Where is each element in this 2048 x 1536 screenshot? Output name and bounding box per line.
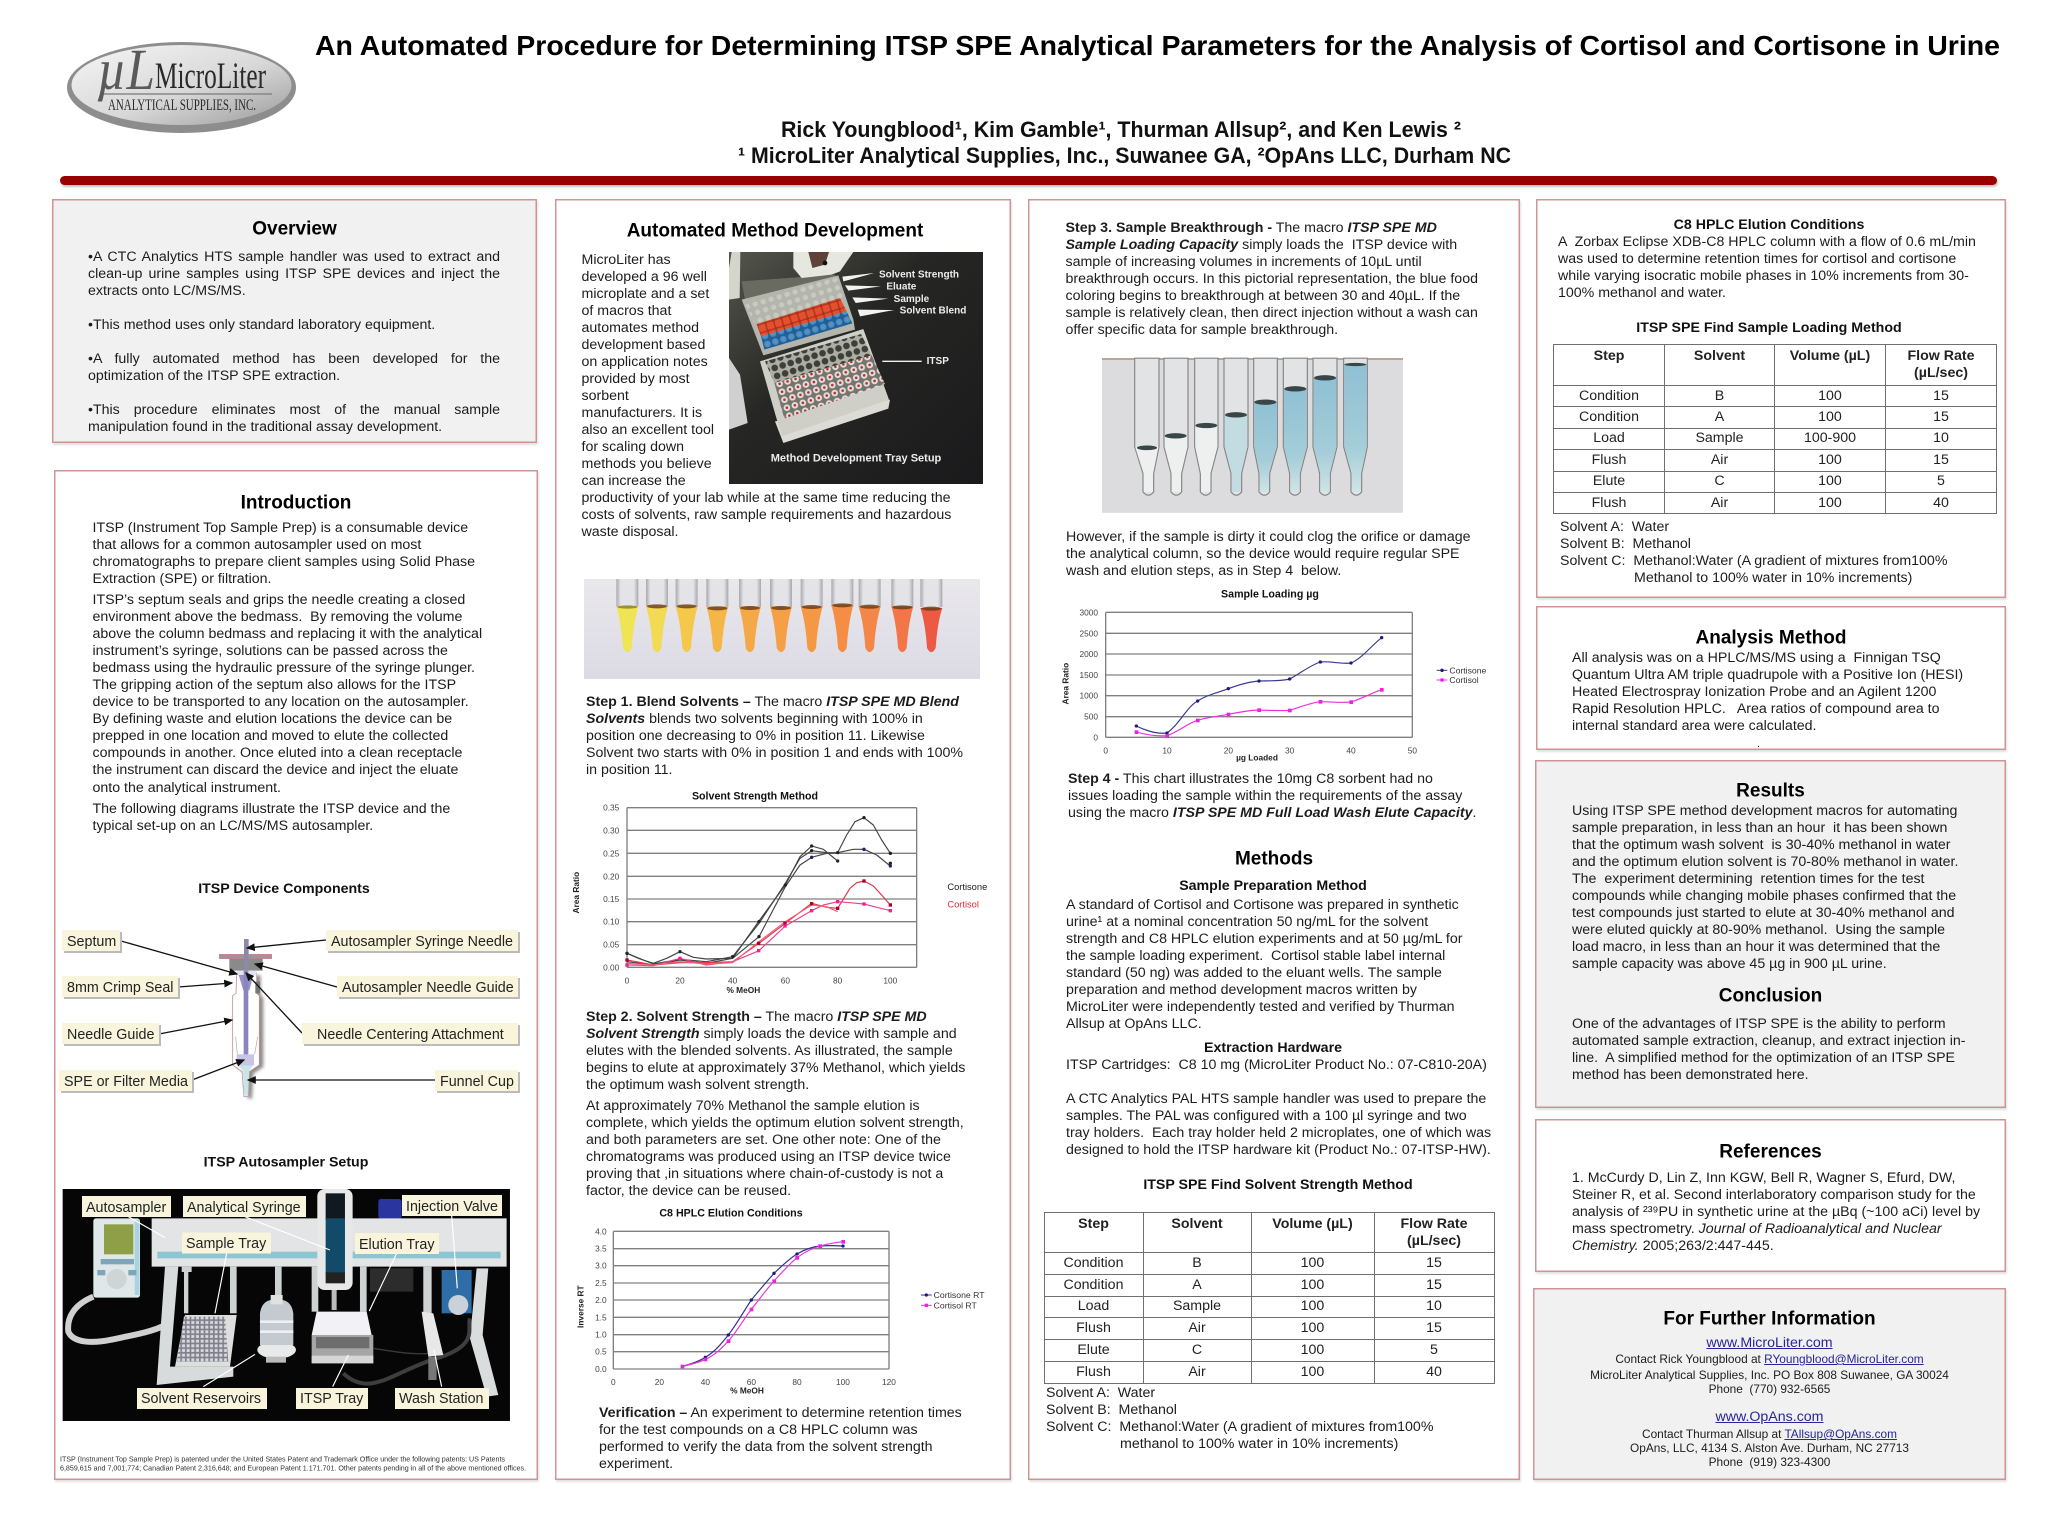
chart: C8 HPLC elution conditions: 60: [747, 1377, 756, 1387]
text: overview bullets: •This procedure eliminates most of the manual sample manipulation found in the traditional assay development.: [88, 402, 500, 435]
table: solvent strength method: 100: [1301, 1298, 1324, 1314]
photo: method development tray setup: Sample: [894, 294, 930, 305]
text: patent notice: 6,859,615 and 7,001,774; Canadian Patent 2,316,648; and European Patent 1.171.701. Other patents pending in all of the above mentioned offices.: [60, 1466, 526, 1472]
table: sample loading method: 100-900: [1804, 430, 1856, 446]
heading: results: Results: [1736, 780, 1805, 802]
chart: C8 HPLC elution conditions: [575, 1208, 985, 1396]
chart: C8 HPLC elution conditions: 100: [836, 1377, 850, 1387]
chart: solvent strength method: 20: [675, 976, 685, 986]
table: solvent strength method: 15: [1426, 1320, 1442, 1336]
contact: MicroLiter: MicroLiter Analytical Supplies, Inc. PO Box 808 Suwanee, GA 30024: [1590, 1368, 1949, 1382]
chart: solvent strength method: % MeOH: [726, 985, 760, 995]
table: sample loading method: Condition: [1579, 409, 1639, 425]
table: solvent strength method: 100: [1301, 1364, 1324, 1380]
heading: C8 HPLC elution conditions: C8 HPLC Elution Conditions: [1674, 216, 1864, 232]
text: method development intro: MicroLiter has developed a 96 well microplate and a set of macros that automates method development based on application notes provided by most sorbent manufacturers. It is also an excellent tool for scaling down methods you believe can increase the productivity of your lab while at the same time reducing the costs of solvents, raw sample requirements and hazardous waste disposal.: [582, 252, 951, 540]
chart: C8 HPLC elution conditions: 4.0: [595, 1226, 607, 1236]
table: solvent strength method: 5: [1430, 1342, 1438, 1358]
table: sample loading method: 100: [1818, 409, 1842, 425]
table: sample loading method: 100: [1818, 388, 1842, 404]
chart: sample loading: 3000: [1079, 607, 1098, 617]
table: solvent strength method: 15: [1426, 1255, 1442, 1271]
table: sample loading method: 100: [1818, 495, 1842, 511]
panel: for further information: [1533, 1288, 2006, 1480]
subheading: sample loading method table: ITSP SPE Find Sample Loading Method: [1636, 320, 1902, 336]
subheading: extraction hardware: Extraction Hardware: [1204, 1040, 1342, 1056]
chart legend: Cortisol RT: [934, 1300, 978, 1310]
diagram group: device and setup: Autosampler Syringe Needle: [331, 934, 513, 950]
chart: solvent strength method: 40: [728, 976, 738, 986]
table: sample loading method: Condition: [1579, 388, 1639, 404]
table: sample loading method: 5: [1937, 473, 1945, 489]
table: solvent strength method: Flush: [1076, 1364, 1111, 1380]
authors: Rick Youngblood¹, Kim Gamble¹, Thurman Allsup², and Ken Lewis ²: [781, 117, 1461, 142]
callouts: setup leader lines: [128, 1215, 457, 1387]
chart: C8 HPLC elution conditions: 20: [655, 1377, 664, 1387]
logo: MicroLiter Analytical Supplies: [67, 37, 296, 133]
authors: [738, 117, 1511, 168]
text: C8 description: A Zorbax Eclipse XDB-C8 HPLC column with a flow of 0.6 mL/min was used to determine retention times for cortisol and cortisone while varying isocratic mobile phases in 10% increments from 30- 100% methanol and water.: [1558, 234, 1976, 301]
chart: solvent strength method: 0.20: [603, 871, 620, 881]
table: sample loading method: Volume (µL): [1790, 348, 1870, 364]
table: solvent strength method: (µL/sec): [1407, 1233, 1461, 1249]
table: sample loading method: Load: [1593, 430, 1625, 446]
contact: OpAns: [1630, 1409, 1909, 1469]
diagram group: device and setup: Sample Tray: [186, 1236, 267, 1252]
table: solvent strength method: 10: [1426, 1298, 1442, 1314]
table: solvent strength method: Solvent: [1171, 1216, 1223, 1232]
chart: sample loading: 10: [1162, 745, 1172, 755]
text: solvent key: Solvent A: Water Solvent B: Methanol Solvent C: Methanol:Water (A gradient of mixtures from100% methanol to 100% water in 10% increments): [1046, 1384, 1433, 1452]
chart legend: [921, 1290, 985, 1310]
panel: automated method development: [555, 199, 1011, 1480]
table: solvent strength method: Flush: [1076, 1320, 1111, 1336]
photo: autosampler setup: [63, 1189, 510, 1421]
table: sample loading method: Step: [1594, 348, 1624, 364]
text: overview bullets: •A fully automated method has been developed for the optimization of the ITSP SPE extraction.: [88, 351, 500, 384]
photo: sample breakthrough vials: [1102, 358, 1403, 513]
contact: OpAns: OpAns, LLC, 4134 S. Alston Ave. Durham, NC 27713: [1630, 1441, 1909, 1455]
table: sample loading method: Elute: [1593, 473, 1625, 489]
chart: solvent strength method: 100: [883, 976, 898, 986]
chart: sample loading: 500: [1084, 711, 1098, 721]
diagram group: device and setup: Elution Tray: [359, 1237, 435, 1253]
text: ITSP cartridges: ITSP Cartridges: C8 10 mg (MicroLiter Product No.: 07-C810-20A): [1066, 1057, 1487, 1073]
diagram group: device and setup: Autosampler Needle Guide: [342, 980, 514, 996]
contact: MicroLiter: [1590, 1335, 1949, 1396]
contact: MicroLiter: Phone (770) 932-6565: [1709, 1382, 1830, 1396]
chart: sample loading: 40: [1346, 745, 1356, 755]
chart: solvent strength method: 0.15: [603, 894, 620, 904]
chart: C8 HPLC elution conditions: 1.5: [595, 1312, 607, 1322]
table: solvent strength method: B: [1192, 1255, 1202, 1271]
diagram group: device and setup: Solvent Reservoirs: [141, 1391, 261, 1407]
table: sample loading method: 100: [1818, 452, 1842, 468]
chart title: Solvent Strength Method: [692, 790, 818, 802]
table: sample loading method: Flow Rate: [1907, 348, 1974, 364]
text: intro paragraph 1: ITSP (Instrument Top Sample Prep) is a consumable device that allows for a common autosampler used on most chromatographs to prepare client samples using Solid Phase Extraction (SPE) or filtration.: [92, 520, 475, 587]
chart: C8 HPLC elution conditions: 0.0: [595, 1364, 607, 1374]
heading: conclusion: Conclusion: [1719, 986, 1822, 1006]
contact: OpAns: Contact Thurman Allsup at TAllsup@OpAns.com: [1642, 1427, 1897, 1441]
chart: C8 HPLC elution conditions: Inverse RT: [575, 1285, 585, 1328]
panel: analysis method: [1536, 606, 2006, 750]
logo: MicroLiter Analytical Supplies: µL: [97, 37, 155, 102]
text: step 4: Step 4 - This chart illustrates the 10mg C8 sorbent had no issues loading the sample within the requirements of the assay using the macro ITSP SPE MD Full Load Wash Elute Capacity.: [1068, 770, 1476, 821]
chart legend: Cortisone: [1449, 665, 1487, 675]
table: solvent strength method: Condition: [1064, 1277, 1123, 1293]
chart: C8 HPLC elution conditions: 1.0: [595, 1330, 607, 1340]
panel: C8 HPLC elution conditions: [1536, 199, 2006, 598]
table: sample loading method: [1553, 344, 1997, 514]
panel: results and conclusion: [1535, 760, 2006, 1108]
diagram group: device and setup: SPE or Filter Media: [64, 1074, 188, 1090]
chart: C8 HPLC elution conditions: 0: [611, 1377, 616, 1387]
subheading: solvent strength method table: ITSP SPE Find Solvent Strength Method: [1143, 1177, 1413, 1193]
text: sample preparation: A standard of Cortisol and Cortisone was prepared in synthetic urine¹ at a nominal concentration 50 ng/mL for the solvent strength and C8 HPLC elution experiments and at 50 µg/mL for the sample loading experiment. Cortisol stable label internal standard (50 ng) was added to the eluant wells. The sample preparation and method development macros written by MicroLiter were independently tested and verified by Thurman Allsup at OpAns LLC.: [1066, 896, 1462, 1032]
chart: sample loading: 50: [1408, 745, 1417, 755]
table: solvent strength method: 40: [1426, 1364, 1442, 1380]
table: solvent strength method: C: [1192, 1342, 1202, 1358]
table: sample loading method: Sample: [1695, 430, 1744, 446]
title divider bar: [60, 176, 1997, 185]
chart: sample loading: 30: [1285, 745, 1295, 755]
heading: ITSP autosampler setup: ITSP Autosampler Setup: [204, 1154, 369, 1170]
contact: MicroLiter: www.MicroLiter.com: [1706, 1335, 1833, 1351]
panel: overview: [52, 199, 537, 443]
chart: solvent strength method: 0.30: [603, 825, 620, 835]
title: An Automated Procedure for Determining ITSP SPE Analytical Parameters for the Analysis of Cortisol and Cortisone in Urine: [315, 30, 2000, 61]
text: patent notice: [60, 1456, 526, 1472]
chart: sample loading: Area Ratio: [1060, 662, 1070, 704]
chart: C8 HPLC elution conditions: 40: [701, 1377, 710, 1387]
diagram group: device and setup: [59, 881, 526, 1472]
chart: solvent strength method: 0.35: [603, 803, 620, 813]
text: step 3: Step 3. Sample Breakthrough - The macro ITSP SPE MD Sample Loading Capacity simply loads the ITSP device with sample of increasing volumes in increments of 10µL until breakthrough occurs. In this pictorial representation, the blue food coloring begins to breakthrough at between 30 and 40µL. If the sample is relatively clean, then direct injection without a wash can offer specific data for sample breakthrough.: [1066, 220, 1478, 338]
chart: C8 HPLC elution conditions: 3.0: [595, 1261, 607, 1271]
chart: solvent strength method: 0.00: [603, 962, 620, 972]
panel: references: [1535, 1119, 2006, 1272]
text: reference list: 1. McCurdy D, Lin Z, Inn KGW, Bell R, Wagner S, Efurd, DW, Steiner R, et al. Second interlaboratory comparison study for the analysis of ²³⁹PU in synthetic urine at the µBq (~100 aCi) level by mass spectrometry. Journal of Radioanalytical and Nuclear Chemistry. 2005;263/2:447-445.: [1572, 1170, 1980, 1254]
contact: MicroLiter: Contact Rick Youngblood at RYoungblood@MicroLiter.com: [1615, 1352, 1924, 1366]
table: sample loading method: A: [1715, 409, 1724, 425]
chart: sample loading: 1000: [1079, 690, 1098, 700]
text: patent notice: ITSP (Instrument Top Sample Prep) is patented under the United States Patent and Trademark Office under the following patents: US Patents: [60, 1456, 506, 1464]
logo: MicroLiter Analytical Supplies: MicroLiter: [155, 56, 266, 97]
table: solvent strength method: Air: [1188, 1320, 1206, 1336]
table: sample loading method: 15: [1933, 409, 1949, 425]
text: step 1: Step 1. Blend Solvents – The macro ITSP SPE MD Blend Solvents blends two solvents beginning with 100% in position one decreasing to 0% in position 11. Likewise Solvent two starts with 0% in position 1 and ends with 100% in position 11.: [586, 694, 963, 778]
panel: steps and methods: [1028, 199, 1520, 1480]
contact: OpAns: www.OpAns.com: [1715, 1409, 1824, 1425]
chart: C8 HPLC elution conditions: 2.5: [595, 1278, 607, 1288]
diagram group: device and setup: 8mm Crimp Seal: [67, 980, 173, 996]
photo: method development tray setup: ITSP: [927, 356, 949, 367]
text: intro paragraph 2: ITSP’s septum seals and grips the needle creating a closed environment above the bedmass. By removing the volume above the column bedmass and replacing it with the analytical instrument’s syringe, solutions can be passed across the bedmass using the hydraulic pressure of the syringe plunger. The gripping action of the septum also allows for the ITSP device to be transported to any location on the autosampler. By defining waste and elution locations the device can be prepped in one location and moved to elute the collected compounds in another. Once eluted into a clean receptacle the instrument can discard the device and inject the eluate onto the analytical instrument.: [92, 592, 482, 796]
diagram group: device and setup: ITSP Tray: [300, 1391, 364, 1407]
chart: sample loading: 2500: [1079, 628, 1098, 638]
photo: method development tray setup: Solvent Blend: [900, 306, 966, 317]
text: overview bullets: •A CTC Analytics HTS sample handler was used to extract and clean-up urine samples using ITSP SPE devices and inject the extracts onto LC/MS/MS.: [88, 248, 500, 299]
text: intro paragraph 3: The following diagrams illustrate the ITSP device and the typical set-up on an LC/MS/MS autosampler.: [92, 801, 450, 834]
chart: C8 HPLC elution conditions: 2.0: [595, 1295, 607, 1305]
text: step 2: Step 2. Solvent Strength – The macro ITSP SPE MD Solvent Strength simply loads the device with sample and elutes with the blended solvents. As illustrated, the sample begins to elute at approximately 37% Methanol, which yields the optimum wash solvent strength.: [586, 1008, 965, 1093]
heading: overview: Overview: [252, 218, 337, 240]
chart: solvent strength method: 0.25: [603, 848, 620, 858]
chart legend: [947, 882, 987, 909]
heading: introduction: Introduction: [241, 492, 351, 513]
table: solvent strength method: Step: [1078, 1216, 1109, 1232]
table: sample loading method: Flush: [1592, 452, 1626, 468]
table: sample loading method: Air: [1711, 495, 1728, 511]
heading: references: References: [1719, 1141, 1822, 1162]
diagram group: device and setup: Septum: [67, 934, 116, 950]
diagram group: device and setup: Needle Centering Attachment: [317, 1027, 504, 1043]
chart: solvent strength method: 0.10: [603, 917, 620, 927]
photo: method development tray setup: Solvent Strength: [879, 269, 959, 280]
table: solvent strength method: A: [1192, 1277, 1202, 1293]
heading: analysis method: Analysis Method: [1696, 628, 1846, 648]
table: solvent strength method: Air: [1188, 1364, 1206, 1380]
photo: method development tray setup: [729, 252, 983, 484]
chart: sample loading: 1500: [1079, 670, 1098, 680]
table: solvent strength method: 15: [1426, 1277, 1442, 1293]
table: sample loading method: 10: [1933, 430, 1949, 446]
table: solvent strength method: 100: [1301, 1277, 1324, 1293]
chart legend: Cortisol: [1449, 675, 1479, 685]
table: sample loading method: Flush: [1592, 495, 1626, 511]
chart: solvent strength method: 0.05: [603, 940, 620, 950]
table: solvent strength method: 100: [1301, 1255, 1324, 1271]
contact: OpAns: Phone (919) 323-4300: [1709, 1455, 1830, 1469]
table: sample loading method: 100: [1818, 473, 1842, 489]
text: overview bullets: [88, 248, 500, 435]
diagram group: device and setup: Injection Valve: [406, 1199, 498, 1215]
chart: sample loading: [1060, 588, 1487, 762]
heading: for further information: For Further Information: [1663, 1308, 1876, 1330]
chart: solvent strength method: 80: [833, 976, 843, 986]
panel: introduction: [54, 470, 538, 1480]
chart: solvent strength method: [571, 790, 987, 995]
text: verification: Verification – An experiment to determine retention times for the test compounds on a C8 HPLC column was performed to verify the data from the solvent strength experiment.: [599, 1404, 962, 1472]
chart: sample loading: 0: [1093, 732, 1098, 742]
table: sample loading method: Solvent: [1694, 348, 1745, 364]
table: solvent strength method: Condition: [1064, 1255, 1123, 1271]
chart: sample loading: 2000: [1079, 649, 1098, 659]
chart legend: Cortisone: [947, 882, 987, 892]
chart title: Sample Loading µg: [1221, 588, 1319, 600]
chart: C8 HPLC elution conditions: % MeOH: [730, 1386, 764, 1396]
table: solvent strength method: [1044, 1212, 1495, 1384]
table: sample loading method: Air: [1711, 452, 1728, 468]
table: sample loading method: 40: [1933, 495, 1949, 511]
text: conclusion: One of the advantages of ITSP SPE is the ability to perform automated sample extraction, cleanup, and extract injection in- line. A simplified method for the optimization of an ITSP SPE method has been demonstrated here.: [1572, 1016, 1966, 1083]
chart: solvent strength method: 60: [781, 976, 790, 986]
table: solvent strength method: 100: [1301, 1342, 1324, 1358]
text: step 2 continued: At approximately 70% Methanol the sample elution is complete, which yields the optimum elution solvent strength, and both parameters are set. One other note: One of the chromatograms was produced using an ITSP device twice proving that ,in situations where chain-of-custody is not a factor, the device can be reused.: [586, 1098, 964, 1199]
text: overview bullets: •This method uses only standard laboratory equipment.: [88, 317, 435, 333]
chart legend: Cortisone RT: [934, 1290, 985, 1300]
diagram group: device and setup: Analytical Syringe: [187, 1200, 301, 1216]
heading: automated method development: Automated Method Development: [627, 220, 923, 242]
chart legend: [1437, 665, 1487, 685]
diagram group: device and setup: Funnel Cup: [440, 1074, 514, 1090]
subheading: sample preparation method: Sample Preparation Method: [1179, 878, 1367, 894]
table: solvent strength method: Sample: [1173, 1298, 1221, 1314]
diagram: ITSP device: [219, 939, 272, 1099]
table: solvent strength method: Volume (µL): [1272, 1216, 1353, 1232]
text: analysis method: All analysis was on a HPLC/MS/MS using a Finnigan TSQ Quantum Ultra AM triple quadrupole with a Positive Ion (HESI) Heated Electrospray Ionization Probe and an Agilent 1200 Rapid Resolution HPLC. Area ratios of compound area to internal standard area were calculated. .: [1572, 650, 1963, 750]
text: solvent key: Solvent A: Water Solvent B: Methanol Solvent C: Methanol:Water (A gradient of mixtures from100% Methanol to 100% water in 10% increments): [1560, 519, 1947, 586]
table: solvent strength method: Load: [1078, 1298, 1109, 1314]
chart: C8 HPLC elution conditions: 3.5: [595, 1244, 607, 1254]
photo: method development tray setup: Eluate: [886, 282, 917, 293]
heading: methods: Methods: [1235, 848, 1313, 870]
table: sample loading method: B: [1715, 388, 1724, 404]
chart: sample loading: 0: [1103, 745, 1108, 755]
heading: ITSP device components: ITSP Device Components: [198, 881, 370, 897]
text: dirty sample note: However, if the sample is dirty it could clog the orifice or damage the analytical column, so the device would require regular SPE wash and elution steps, as in Step 4 below.: [1066, 528, 1471, 579]
callouts: device components: [121, 940, 435, 1080]
table: solvent strength method: Flow Rate: [1400, 1216, 1468, 1232]
authors: ¹ MicroLiter Analytical Supplies, Inc., Suwanee GA, ²OpAns LLC, Durham NC: [738, 143, 1511, 168]
diagram group: device and setup: Wash Station: [399, 1391, 484, 1407]
photo: blended solvent vials: [584, 579, 980, 679]
table: sample loading method: 15: [1933, 452, 1949, 468]
text: results: Using ITSP SPE method development macros for automating sample preparation, in less than an hour it has been shown that the optimum wash solvent is 30-40% methanol in water and the optimum elution solvent is 70-80% methanol in water. The experiment determining retention times for the test compounds while changing mobile phases confirmed that the test compounds just started to elute at 30-40% methanol and were eluted quickly at 80-90% methanol. Using the sample load macro, in less than an hour it was determined that the sample capacity was above 45 µg in 900 µL urine.: [1572, 802, 1958, 972]
chart: C8 HPLC elution conditions: 0.5: [595, 1347, 607, 1357]
chart: solvent strength method: Area Ratio: [571, 872, 581, 913]
chart: C8 HPLC elution conditions: 80: [792, 1377, 802, 1387]
photo: method development tray setup: Method Development Tray Setup: [771, 453, 942, 465]
diagram group: device and setup: Autosampler: [86, 1200, 166, 1216]
chart: C8 HPLC elution conditions: 120: [882, 1377, 896, 1387]
chart legend: Cortisol: [947, 899, 979, 909]
chart: solvent strength method: 0: [625, 976, 630, 986]
text: CTC handler: A CTC Analytics PAL HTS sample handler was used to prepare the samples. The PAL was configured with a 100 µl syringe and two tray holders. Each tray holder held 2 microplates, one of which was designed to hold the ITSP hardware kit (Product No.: 07-ITSP-HW).: [1066, 1091, 1491, 1158]
table: sample loading method: (µL/sec): [1914, 365, 1968, 381]
chart title: C8 HPLC Elution Conditions: [659, 1208, 803, 1220]
logo: MicroLiter Analytical Supplies: ANALYTICAL SUPPLIES, INC.: [108, 97, 256, 114]
table: sample loading method: 15: [1933, 388, 1949, 404]
table: solvent strength method: Elute: [1077, 1342, 1110, 1358]
diagram group: device and setup: Needle Guide: [67, 1027, 154, 1043]
chart: sample loading: 20: [1224, 745, 1233, 755]
chart: sample loading: µg Loaded: [1236, 752, 1278, 762]
table: sample loading method: C: [1714, 473, 1725, 489]
table: solvent strength method: 100: [1301, 1320, 1324, 1336]
